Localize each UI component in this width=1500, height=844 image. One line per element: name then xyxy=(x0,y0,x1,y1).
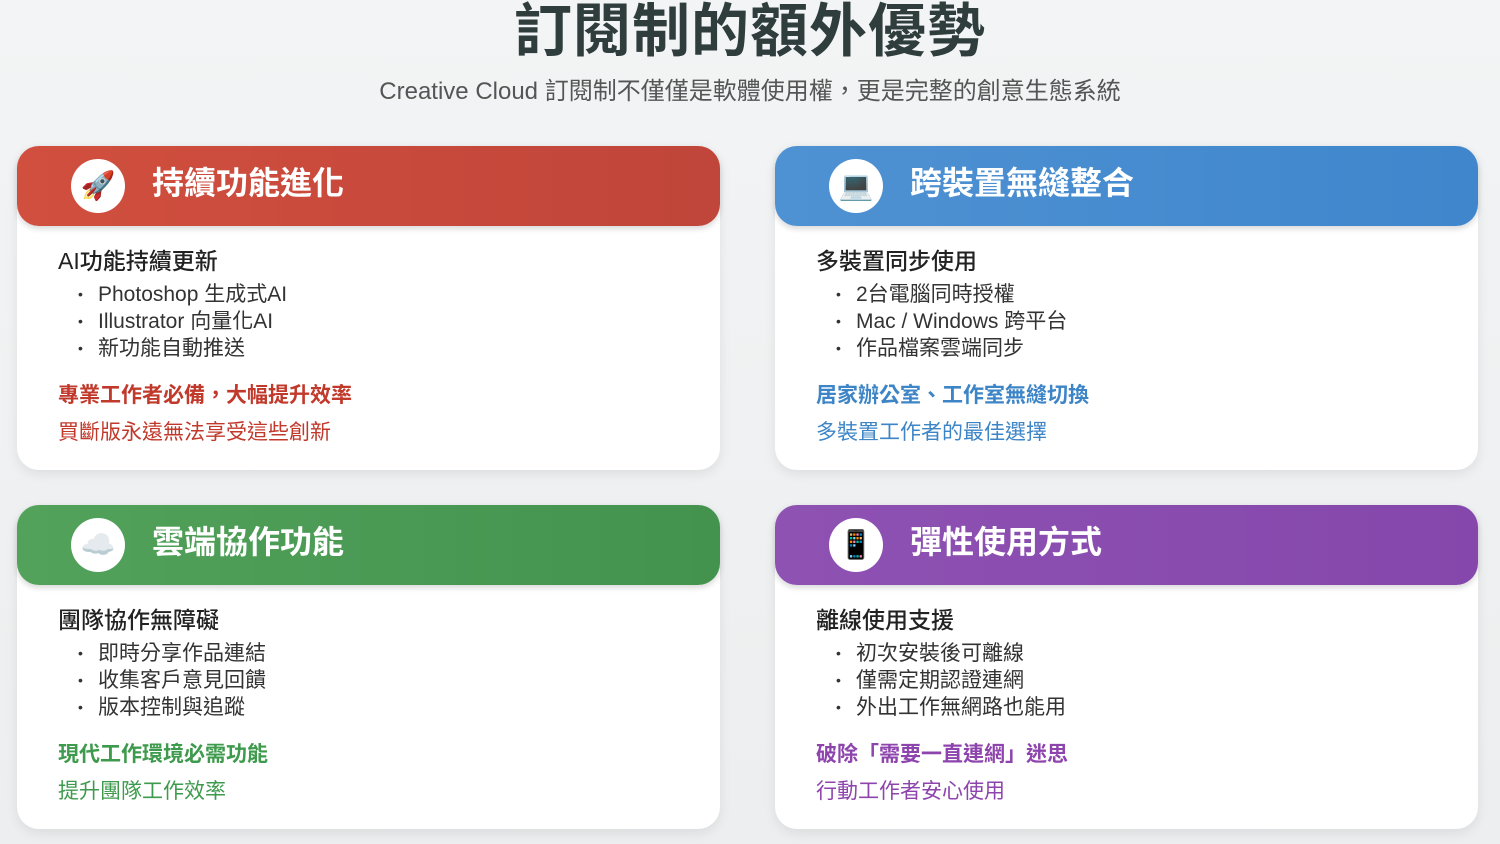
panel: cloud collaboration xyxy=(17,505,720,829)
text block xyxy=(58,607,268,803)
header: green: 雲端協作功能 xyxy=(152,524,344,560)
text block: 作品檔案雲端同步 xyxy=(856,337,1024,360)
text block: 破除「需要一直連網」迷思 xyxy=(816,743,1068,766)
text block: 僅需定期認證連網 xyxy=(856,669,1024,692)
text block xyxy=(58,248,352,444)
text block: 提升團隊工作效率 xyxy=(58,780,226,803)
header: red xyxy=(17,146,720,226)
text block: 離線使用支援 xyxy=(816,607,954,633)
text block: 新功能自動推送 xyxy=(98,337,245,360)
header: purple xyxy=(775,505,1478,585)
text block: 多裝置同步使用 xyxy=(816,248,977,274)
text block: 即時分享作品連結 xyxy=(98,642,266,665)
text block: 買斷版永遠無法享受這些創新 xyxy=(58,421,331,444)
text block: 初次安裝後可離線 xyxy=(856,642,1024,665)
header: purple: 彈性使用方式 xyxy=(910,524,1102,560)
panel: flexible usage xyxy=(775,505,1478,829)
text block: 專業工作者必備，大幅提升效率 xyxy=(58,384,352,407)
title: 訂閱制的額外優勢 xyxy=(514,0,986,64)
text block xyxy=(816,607,1068,803)
text block: 居家辦公室、工作室無縫切換 xyxy=(816,384,1089,407)
panel: feature evolution xyxy=(17,146,720,470)
text block: 團隊協作無障礙 xyxy=(58,607,219,633)
header: blue: 跨裝置無縫整合 xyxy=(910,165,1134,201)
text block: 外出工作無網路也能用 xyxy=(856,696,1066,719)
header: purple: 📱 xyxy=(839,529,873,560)
text block: 2台電腦同時授權 xyxy=(856,283,1015,306)
header: green xyxy=(17,505,720,585)
header: green: ☁️ xyxy=(81,529,115,560)
text block: 行動工作者安心使用 xyxy=(816,780,1005,803)
subtitle: Creative Cloud 訂閱制不僅僅是軟體使用權，更是完整的創意生態系統 xyxy=(379,78,1121,105)
text block xyxy=(816,248,1089,444)
text block: AI功能持續更新 xyxy=(58,248,218,274)
header: blue xyxy=(775,146,1478,226)
header: red: 🚀 xyxy=(81,170,115,201)
text block: Photoshop 生成式AI xyxy=(98,283,287,306)
header: blue: 💻 xyxy=(839,170,873,201)
text block: 現代工作環境必需功能 xyxy=(58,743,268,766)
text block: 多裝置工作者的最佳選擇 xyxy=(816,421,1047,444)
text block: 收集客戶意見回饋 xyxy=(98,669,266,692)
header: red: 持續功能進化 xyxy=(152,165,344,201)
text block: 版本控制與追蹤 xyxy=(98,696,245,719)
panel: cross-device xyxy=(775,146,1478,470)
text block: Mac / Windows 跨平台 xyxy=(856,310,1067,333)
text block: Illustrator 向量化AI xyxy=(98,310,273,333)
